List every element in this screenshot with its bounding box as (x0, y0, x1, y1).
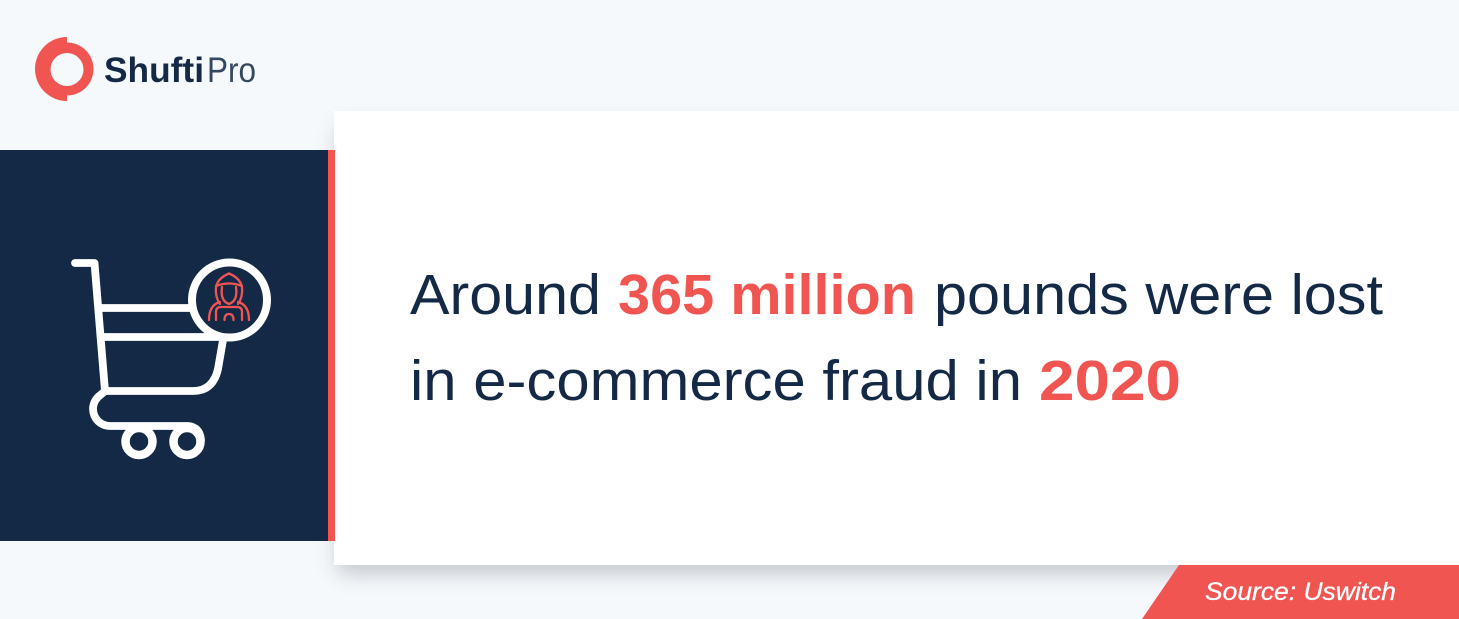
source tag shape (1142, 565, 1459, 619)
source tag (1142, 565, 1459, 619)
cart frame (75, 263, 223, 440)
accent bar (328, 150, 335, 541)
hacker figure (209, 274, 249, 320)
logo wordmark: Shufti (104, 51, 204, 90)
panel: white statement card (334, 111, 1459, 565)
panel: navy icon block (0, 150, 328, 541)
logo: Shufti Pro (35, 37, 256, 101)
hacker badge (192, 262, 267, 338)
headline statement (410, 263, 1383, 413)
source text: Source: Uswitch (1205, 578, 1396, 606)
icon: logo ring (35, 37, 94, 101)
headline line 1: Around (410, 263, 601, 327)
headline line 1: pounds were lost (934, 263, 1383, 327)
headline line 2: 2020 (1039, 349, 1181, 413)
icon: shopping cart with hacker badge (71, 258, 271, 460)
headline line 1: 365 million (618, 263, 916, 327)
headline line 1 (410, 263, 1383, 327)
logo wordmark light: Pro (207, 51, 256, 90)
cart wheels (126, 428, 200, 455)
headline line 2: in e-commerce fraud in (410, 349, 1022, 413)
